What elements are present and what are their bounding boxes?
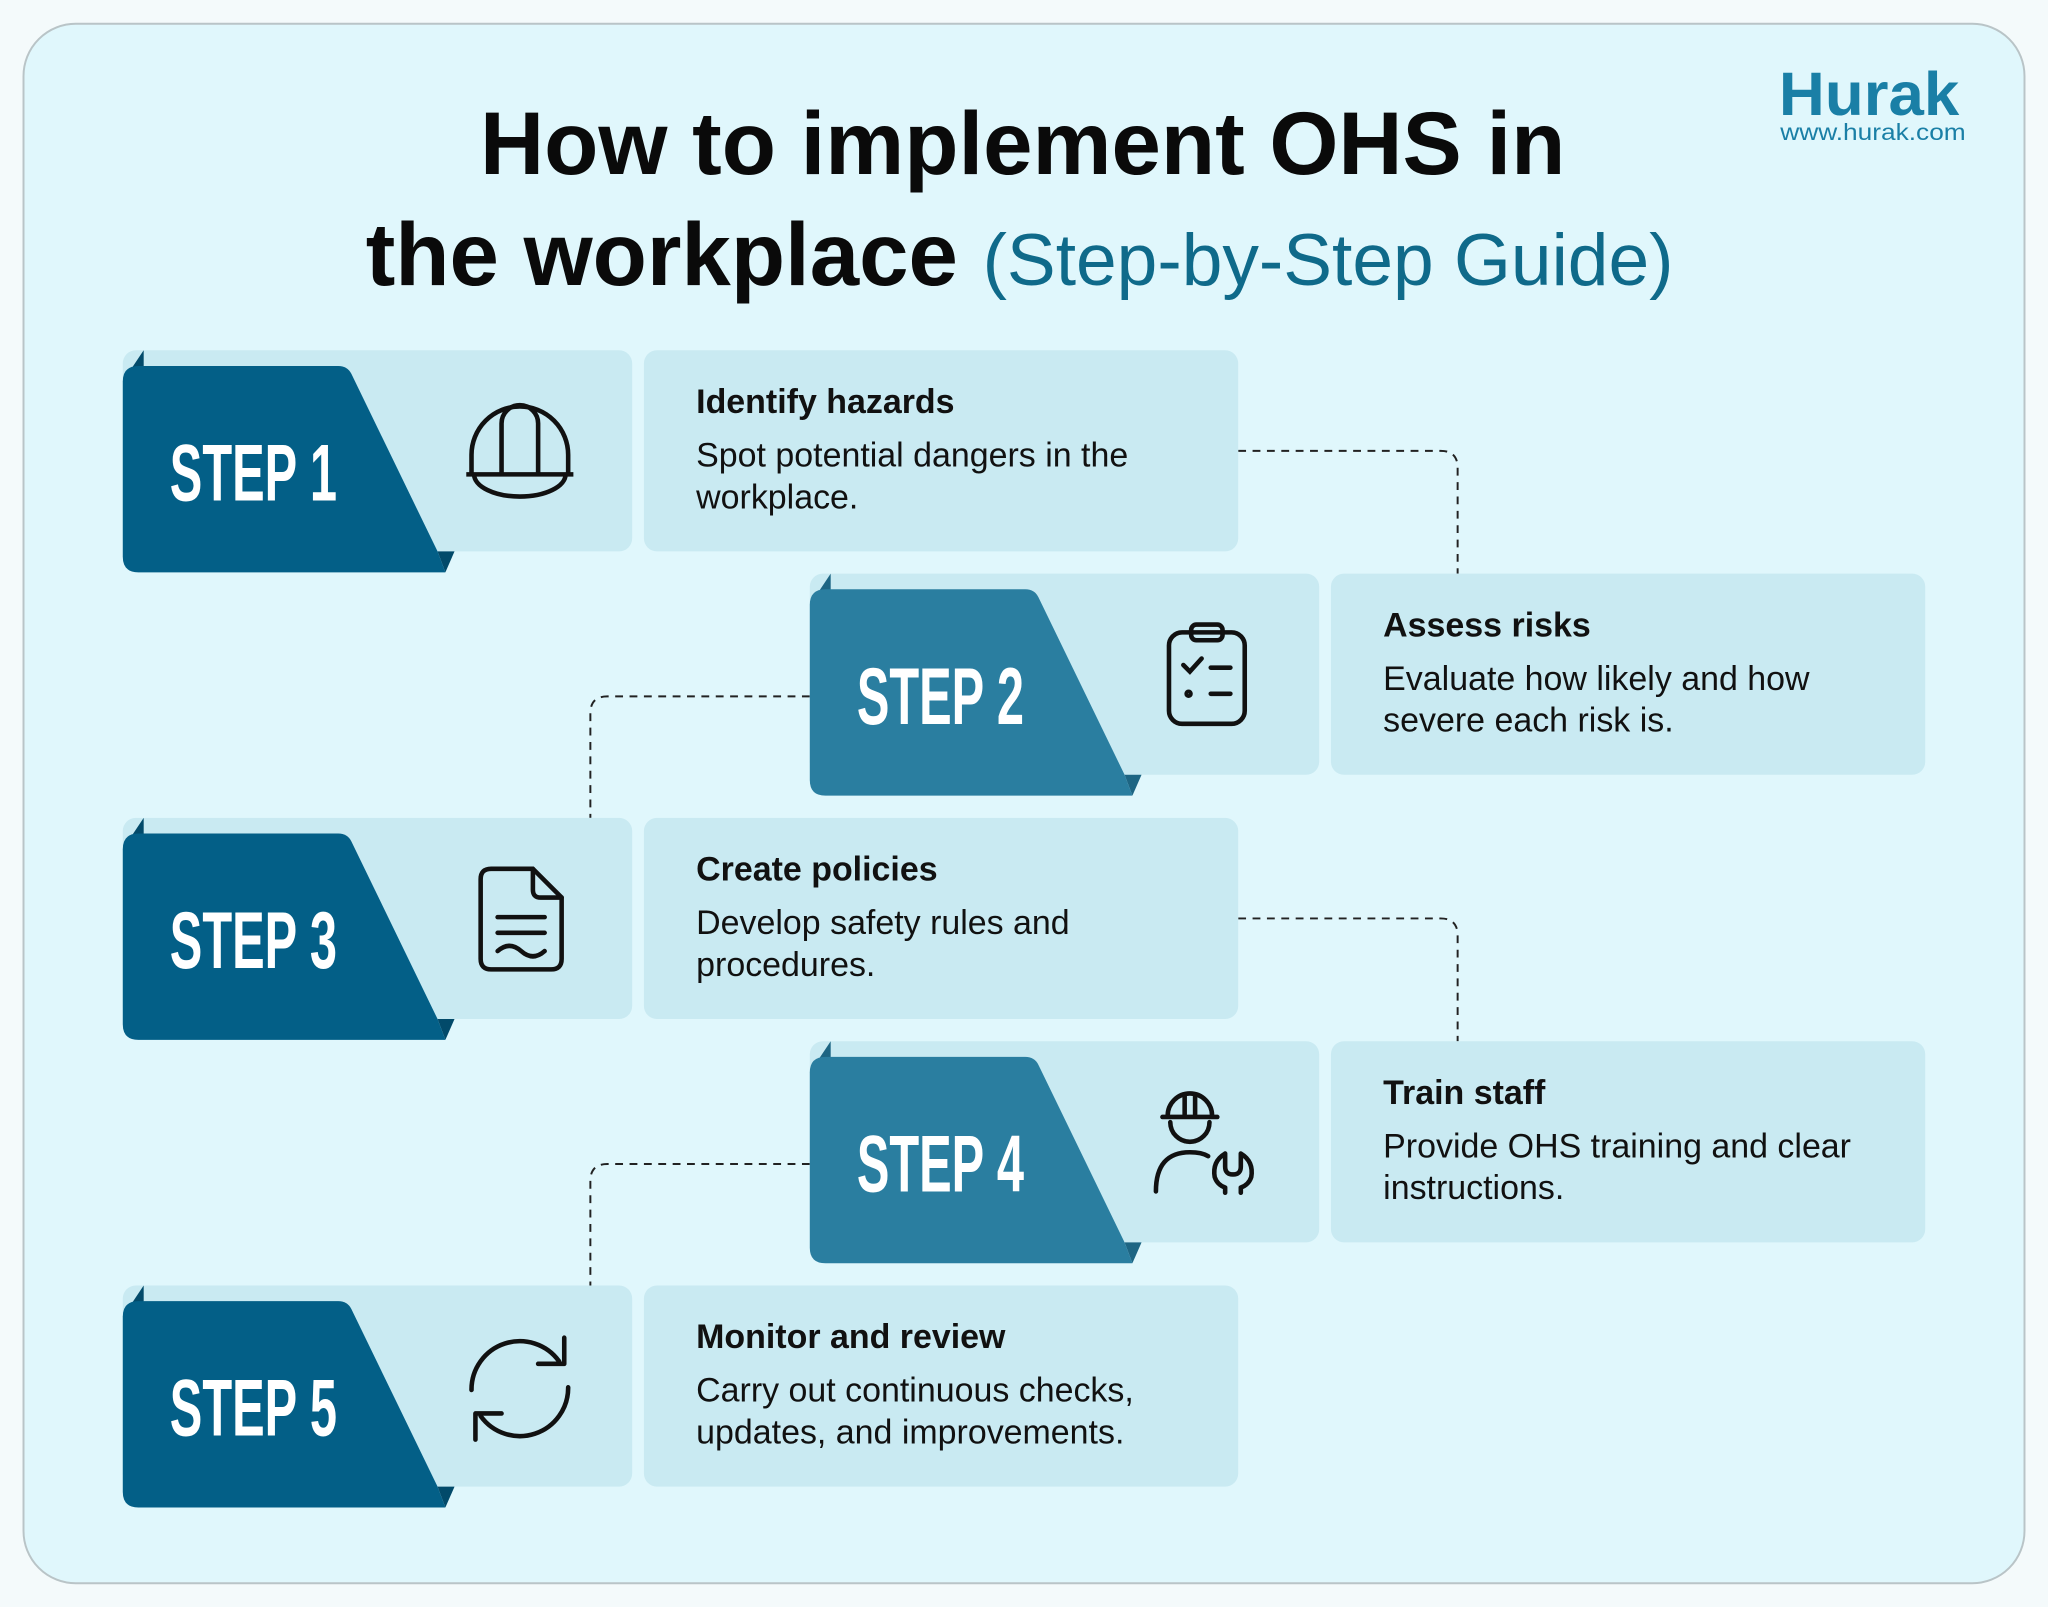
step 1: Identify hazards [696, 383, 955, 421]
title: How to implement OHS in [480, 94, 1565, 193]
step 5: STEP 5 [170, 1364, 337, 1454]
icon: worker with wrench [1156, 1093, 1252, 1193]
icon: refresh arrows [472, 1338, 568, 1440]
step 1: workplace. [695, 478, 858, 516]
icon: document [481, 869, 562, 969]
step 2 [810, 574, 1925, 796]
step 1 [123, 350, 1238, 572]
step 3: Develop safety rules and [696, 904, 1070, 942]
step 2: Evaluate how likely and how [1383, 660, 1810, 698]
step 4: Provide OHS training and clear [1383, 1127, 1851, 1165]
step 4: instructions. [1383, 1169, 1564, 1207]
step 3: procedures. [696, 946, 875, 984]
icon: clipboard checklist [1169, 625, 1245, 724]
icon: hard hat [466, 405, 573, 497]
step 2: Assess risks [1383, 606, 1591, 644]
step 1: Spot potential dangers in the [696, 437, 1128, 475]
step 4: STEP 4 [857, 1119, 1024, 1209]
step 4: Train staff [1383, 1074, 1546, 1112]
step 2: STEP 2 [857, 652, 1024, 742]
logo: Hurak: www.hurak.com [1779, 119, 1966, 145]
step 1: STEP 1 [170, 428, 337, 518]
connectors [590, 451, 1458, 1285]
title: the workplace (Step-by-Step Guide) [366, 205, 1674, 304]
logo: Hurak: Hurak [1779, 60, 1960, 129]
step 5: updates, and improvements. [696, 1414, 1124, 1452]
step 5 [123, 1285, 1238, 1508]
step 3 [123, 818, 1238, 1040]
step 2: severe each risk is. [1383, 702, 1674, 740]
step 4 [810, 1041, 1925, 1263]
step 5: Carry out continuous checks, [696, 1372, 1134, 1410]
title [366, 94, 1674, 304]
step 3: STEP 3 [170, 896, 337, 986]
step 5: Monitor and review [696, 1318, 1006, 1356]
step 3: Create policies [696, 851, 938, 889]
